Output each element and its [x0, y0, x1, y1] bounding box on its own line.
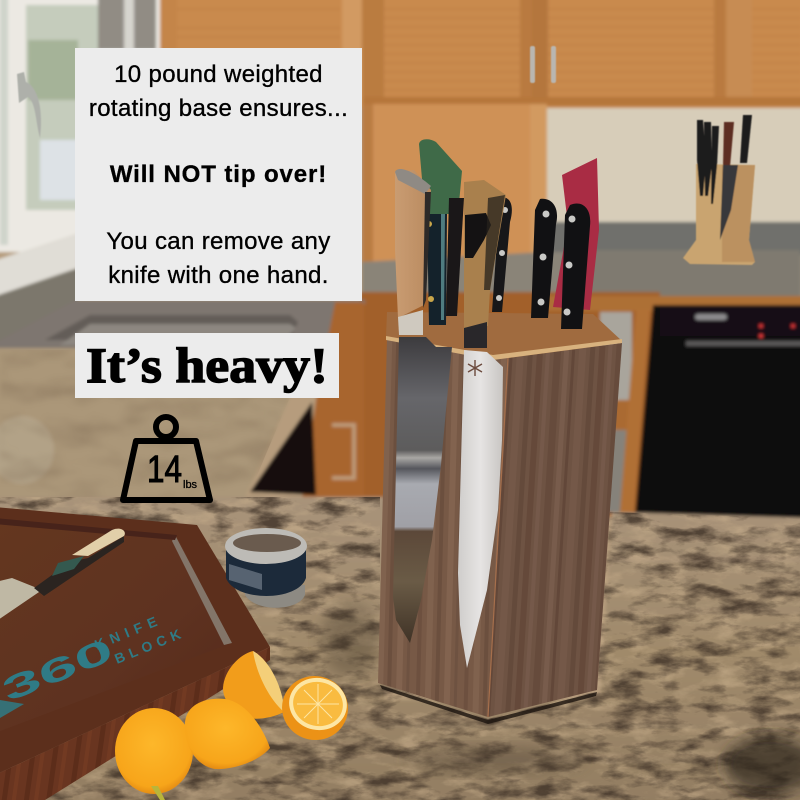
cabinet shadow gap [250, 402, 316, 495]
black handle behind wood [492, 197, 512, 312]
sink [0, 300, 365, 352]
wood and resin handle [464, 180, 506, 328]
left counter [0, 348, 312, 498]
slatted centre panel [364, 104, 546, 264]
cut lemon face [276, 670, 354, 746]
green knife handle [419, 139, 462, 214]
lower cabinets [360, 292, 660, 517]
granite backsplash and back counter [545, 222, 800, 258]
one hand removal text: You can remove any [106, 228, 331, 255]
black handle behind green [446, 198, 464, 316]
weighted base text: rotating base ensures... [89, 94, 348, 122]
lemons [115, 651, 354, 800]
back wall [540, 100, 800, 230]
engraved logo [0, 613, 183, 718]
black steak knife handle [531, 199, 557, 318]
engraved logo: BLOCK [112, 626, 183, 667]
cutting board [0, 507, 270, 800]
weighted base text [89, 61, 348, 122]
blue handle cluster [426, 214, 447, 325]
inner well [0, 520, 232, 733]
banner: it's heavy: It’s heavy! [86, 337, 328, 393]
upper cabinets [150, 0, 800, 108]
chef knife blade [458, 350, 503, 668]
engraved logo: KNIFE [92, 613, 159, 653]
right face [488, 343, 622, 717]
will not tip over statement: Will NOT tip over! [110, 161, 327, 188]
front counter [0, 497, 800, 800]
left face [378, 338, 508, 717]
weight icon: lbs [183, 479, 198, 491]
red knife handle [553, 158, 599, 310]
halved lemon behind [223, 651, 284, 719]
one hand removal text [106, 228, 331, 288]
weighted base text: 10 pound weighted [114, 61, 323, 88]
maker's star mark [468, 360, 482, 376]
whole lemon left [115, 708, 193, 794]
granite texture [0, 350, 800, 800]
left window frame and curtain [0, 0, 160, 252]
bread knife blade [393, 337, 452, 643]
cabinet door handles [17, 46, 556, 138]
weight icon: 14 [147, 449, 182, 491]
black knife handle front [561, 204, 590, 329]
block top [386, 312, 622, 357]
knife on the board [0, 578, 42, 622]
text panel [75, 48, 362, 301]
one hand removal text: knife with one hand. [108, 262, 329, 288]
dishwasher [635, 305, 800, 518]
juice groove [172, 535, 232, 645]
board side [0, 647, 270, 800]
block shadow [380, 685, 597, 724]
background knife block [683, 115, 755, 265]
board top surface [0, 507, 270, 775]
whole lemon middle [185, 699, 270, 769]
weight icon [123, 417, 210, 500]
cabinet under left counter [302, 302, 364, 500]
knife block body [378, 312, 622, 717]
burl wood handle [395, 170, 431, 318]
spice tin [225, 528, 307, 608]
